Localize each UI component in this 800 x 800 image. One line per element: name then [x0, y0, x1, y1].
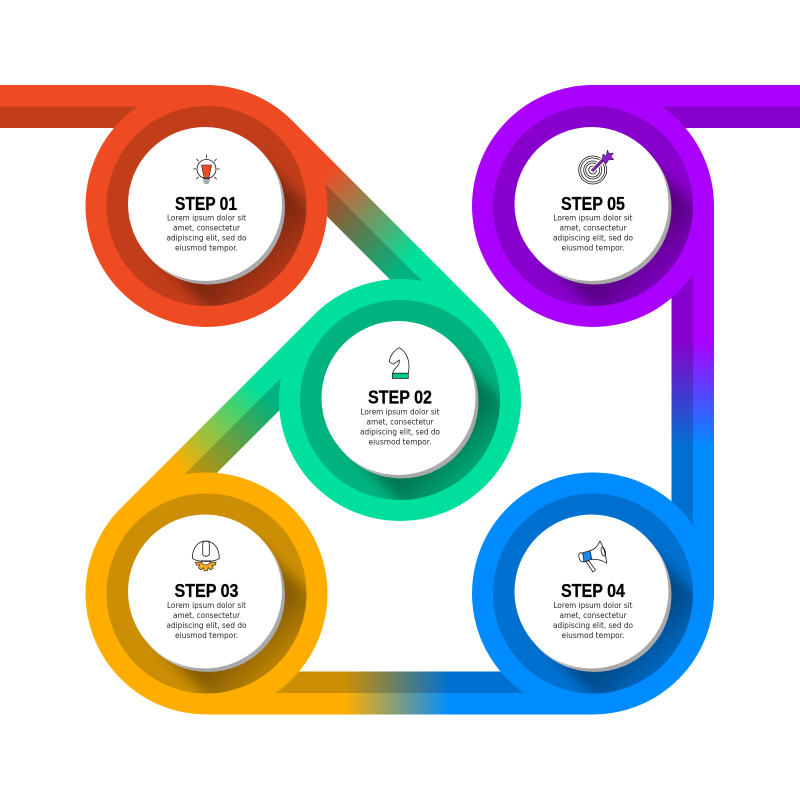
text: step 02 description: adipiscing elit, sed do — [360, 427, 440, 437]
heading: step 02: STEP 02 — [368, 388, 432, 408]
text: step 05 description: Lorem ipsum dolor sit — [554, 213, 633, 223]
text: step 05 description — [553, 213, 633, 253]
text: step 03 description — [166, 600, 247, 640]
text: step 03 description: adipiscing elit, sed do — [166, 620, 246, 630]
ribbon: blue to purple connector — [672, 206, 714, 594]
text: step 04 description: amet, consectetur — [560, 610, 627, 620]
ribbon: green to orange connector — [121, 314, 345, 538]
heading: step 03: STEP 03 — [174, 581, 238, 601]
panel: step 04 — [472, 472, 714, 714]
text: step 02 description: eiusmod tempor. — [368, 437, 432, 447]
text: step 01 description: Lorem ipsum dolor sit — [167, 213, 247, 223]
infographic: five connected steps — [0, 85, 800, 714]
text: step 05 description: amet, consectetur — [560, 223, 627, 233]
icon: helmet and gear — [192, 541, 219, 571]
text: step 04 description: adipiscing elit, sed do — [553, 620, 633, 630]
text: step 01 description — [166, 213, 247, 253]
icon: megaphone — [578, 541, 607, 572]
heading: step 01: STEP 01 — [175, 194, 237, 214]
text: step 04 description: Lorem ipsum dolor sit — [554, 600, 633, 610]
text: step 04 description: eiusmod tempor. — [562, 630, 624, 640]
panel: step 01 — [86, 85, 328, 327]
ribbon: purple outlet to the right — [590, 85, 800, 128]
text: step 05 description: adipiscing elit, sed do — [553, 233, 633, 243]
text: step 01 description: eiusmod tempor. — [175, 243, 238, 253]
text: step 03 description: eiusmod tempor. — [175, 630, 238, 640]
text: step 05 description: eiusmod tempor. — [562, 243, 624, 253]
text: step 03 description: amet, consectetur — [173, 610, 241, 620]
heading: step 05: STEP 05 — [561, 194, 625, 214]
text: step 02 description: amet, consectetur — [366, 417, 434, 427]
panel: step 02 — [279, 279, 521, 521]
ribbon: red inlet from the left — [0, 85, 210, 128]
text: step 03 description: Lorem ipsum dolor sit — [167, 600, 247, 610]
text: step 01 description: adipiscing elit, sed do — [166, 233, 246, 243]
icon: target and dart — [579, 150, 614, 184]
text: step 04 description — [553, 600, 633, 640]
ribbon: red to green connector — [262, 120, 486, 345]
text: step 02 description: Lorem ipsum dolor sit — [360, 407, 440, 417]
panel: step 05 — [472, 85, 714, 327]
icon: chess knight — [389, 348, 409, 378]
text: step 01 description: amet, consectetur — [173, 223, 241, 233]
panel: step 03 — [86, 472, 328, 714]
ribbon: orange to blue connector — [206, 672, 594, 714]
heading: step 04: STEP 04 — [561, 581, 625, 601]
icon: light bulb — [194, 155, 220, 183]
text: step 02 description — [360, 407, 440, 447]
